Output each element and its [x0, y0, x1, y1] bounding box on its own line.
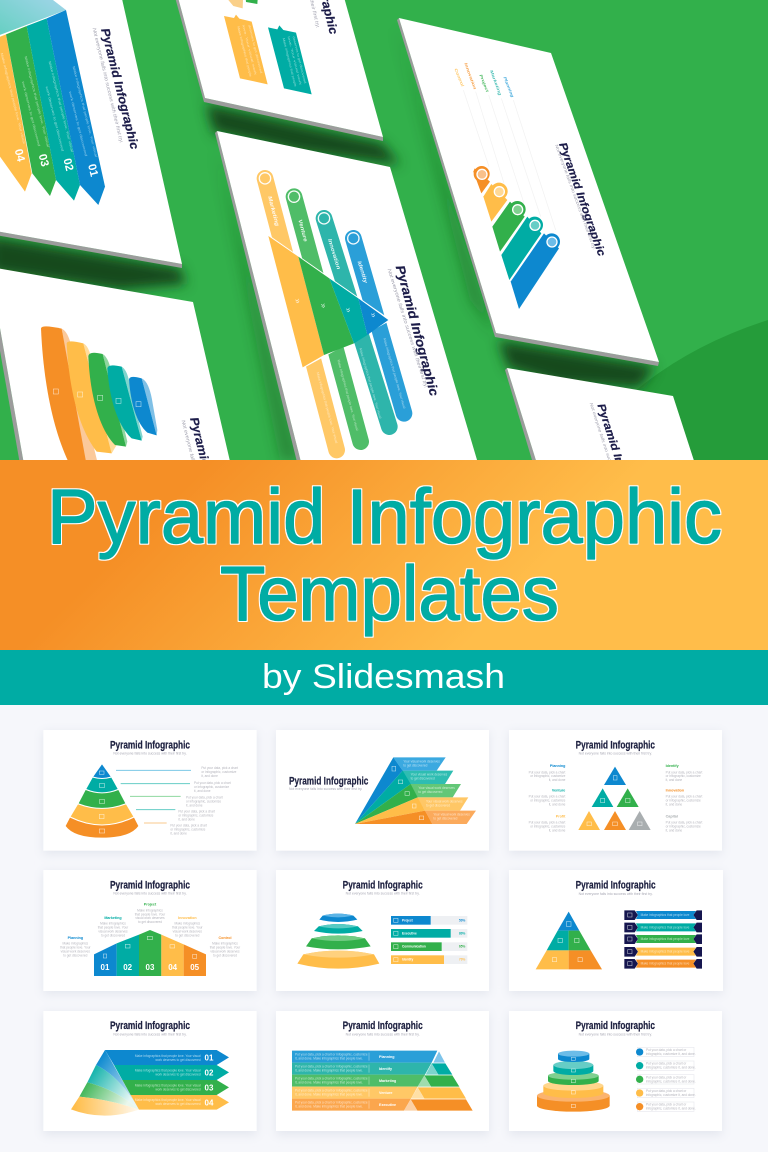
legend: infographic, customize it, and done. [646, 1079, 696, 1083]
legend: Put your data, pick a chart or [646, 1089, 686, 1093]
slide: centre arrow pyramid [215, 131, 480, 470]
arrow pyramid graphic: Make infographics that people love. Your visual [382, 338, 406, 409]
legend: Put your data, pick a chart or [646, 1062, 686, 1066]
descriptions: or infographic, customize [194, 785, 229, 789]
orange title banner [0, 460, 768, 650]
left labels: it, and done [549, 828, 566, 832]
house chart: 03 [146, 963, 155, 972]
heading: Pyramid Infographic [343, 880, 423, 892]
descriptions: it, and done [201, 774, 218, 778]
step labels: visual work deserves [135, 916, 165, 920]
arrow bands: Make infographics that people love. Your visual [135, 1069, 201, 1073]
progress bars: 70% [459, 958, 466, 962]
step labels: visual work deserves [173, 929, 202, 933]
left labels: Put your data, pick a chart [529, 770, 565, 774]
ribbons: Make infographics that people love [641, 937, 690, 941]
arrow pyramid graphic: Innovation [326, 238, 341, 271]
left labels: it, and done [549, 802, 566, 806]
step labels: Innovation [178, 916, 197, 920]
callout boxes: love. Your visual work [287, 36, 303, 86]
table rows: Venture [379, 1091, 392, 1095]
table rows: it, and done. Make infographics that people love. [295, 1105, 363, 1109]
table rows: Planning [379, 1055, 394, 1059]
gallery background [0, 705, 768, 1152]
left labels: or infographic, customize [530, 774, 566, 778]
progress bars: Executive [402, 931, 417, 935]
progress bars: Project [402, 918, 414, 922]
step labels: Project [144, 903, 157, 907]
layers: Your visual work deserves [411, 773, 448, 777]
tiers [537, 1051, 610, 1112]
subheading: Not everyone falls into success with their first try. [113, 752, 187, 756]
left labels: it, and done [549, 778, 566, 782]
progress bars: 80% [459, 931, 466, 935]
layers: to get discovered [418, 790, 443, 794]
step labels: Make infographics [175, 922, 201, 926]
stepped pyramid graphic [453, 62, 607, 309]
descriptions: it, and done [194, 789, 211, 793]
ribbon graphic: 03 [36, 153, 50, 168]
legend: infographic, customize it, and done. [646, 1066, 696, 1070]
layers: to get discovered [433, 817, 458, 821]
table rows: it, and done. Make infographics that people love. [295, 1069, 363, 1073]
legend: infographic, customize it, and done. [646, 1093, 696, 1097]
step labels: to get discovered [175, 933, 200, 937]
callout boxes: Make infographics that people [236, 26, 253, 77]
step labels: visual work deserves [61, 949, 90, 953]
callout boxes: deserves to get discovered [292, 36, 307, 84]
ribbons: Make infographics that people love [641, 962, 690, 966]
arrow pyramid graphic: Make infographics that people love. Your visual [316, 372, 339, 444]
progress bars: 65% [459, 945, 466, 949]
layers: Your visual work deserves [403, 759, 440, 763]
right labels: Identify [666, 764, 680, 768]
heading: Pyramid Infographic [343, 1020, 423, 1032]
subheading: Not everyone falls into success with their first try. [113, 892, 187, 896]
legend: Put your data, pick a chart or [646, 1103, 686, 1107]
stepped pyramid graphic: Not everyone falls into success with their first try. [554, 144, 597, 250]
panel: cone pyramid [43, 730, 257, 851]
right pyramid [404, 1051, 473, 1111]
heading: Pyramid Infographic [110, 739, 190, 751]
descriptions [170, 766, 238, 836]
step labels: that people love. Your [135, 912, 165, 916]
step labels: that people love. Your [210, 946, 240, 950]
panel: table pyramid [276, 1011, 489, 1131]
ribbons: Make infographics that people love [641, 913, 690, 917]
slide: bottom-left stacked discs [0, 267, 232, 540]
arrow bands: work deserves to get discovered [155, 1087, 201, 1091]
callout boxes: deserves to get discovered [247, 24, 263, 74]
panel: triangle grid [509, 730, 722, 851]
panel: layered discs with progress bars [276, 870, 489, 991]
slide: top-right stepped pyramid [397, 18, 659, 366]
arrow pyramid graphic: Pyramid Infographic [393, 264, 441, 398]
ribbon graphic: Not everyone falls into success with their first try. [91, 27, 124, 144]
arrow bands: work deserves to get discovered [155, 1102, 201, 1106]
arrow bands: Make infographics that people love. Your visual [135, 1083, 201, 1087]
triangle [536, 912, 602, 969]
subheading: Not everyone falls into success with their first try. [579, 752, 652, 756]
arrow bands: Make infographics that people love. Your visual [135, 1054, 201, 1058]
step labels: visual work deserves [210, 949, 240, 953]
legend: infographic, customize it, and done. [646, 1052, 696, 1056]
step labels: that people love. Your [60, 946, 91, 950]
left labels: or infographic, customize [530, 824, 566, 828]
byline: by Slidesmash [262, 658, 505, 696]
house chart: 05 [190, 963, 200, 972]
stepped pyramid graphic: Project [478, 74, 490, 94]
layers: Your visual work deserves [418, 786, 455, 790]
left labels [529, 764, 566, 832]
progress bars [391, 916, 467, 964]
descriptions: Put your data, pick a chart [201, 766, 238, 770]
ribbon graphic: Make infographics that people love. Your visual [72, 66, 98, 158]
main title: Templates [220, 551, 559, 637]
right labels: Put your data, pick a chart [666, 821, 702, 825]
subheading: Not everyone falls into success with their first try. [289, 787, 362, 791]
layers [355, 757, 476, 824]
panel: triangle with ribbons [509, 870, 723, 991]
table rows: it, and done. Make infographics that people love. [295, 1057, 363, 1061]
descriptions: Put your data, pick a chart [186, 795, 223, 799]
left labels: or infographic, customize [530, 799, 566, 803]
subheading: Not everyone falls into success with their first try. [346, 1032, 420, 1036]
progress bars: 50% [459, 918, 466, 922]
step labels: visual work deserves [98, 929, 128, 933]
cone [66, 764, 138, 838]
table rows: Identify [379, 1067, 393, 1071]
stacked disc graphic: Not everyone falls into success with their first try. [180, 420, 214, 536]
legend: infographic, customize it, and done. [646, 1107, 696, 1111]
table rows: Put your data, pick a chart or infographic, customize [295, 1089, 368, 1093]
step labels: Planning [68, 936, 83, 940]
descriptions: Put your data, pick a chart [170, 824, 207, 828]
descriptions: Put your data, pick a chart [194, 781, 231, 785]
table rows: Marketing [379, 1079, 396, 1083]
ribbons: Make infographics that people love [641, 925, 690, 929]
panel: round tier stack [509, 1011, 722, 1131]
step labels: Make infographics [137, 908, 163, 912]
right labels: or infographic, customize [666, 799, 701, 803]
panel shadows [43, 732, 723, 1135]
table rows: Put your data, pick a chart or infographic, customize [295, 1077, 368, 1081]
stepped pyramid graphic: Innovation [463, 62, 478, 91]
house chart [94, 930, 206, 976]
step labels: Make infographics [100, 922, 126, 926]
ribbon graphic: work deserves to get discovered [21, 81, 41, 147]
left labels: Planning [550, 764, 565, 768]
slide: top-middle callouts [173, 0, 383, 141]
slide shadows [0, 20, 655, 460]
step labels: Marketing [104, 916, 122, 920]
step labels: Control [218, 936, 231, 940]
panel: slanted layers pyramid [276, 730, 489, 851]
descriptions: or infographic, customize [170, 828, 206, 832]
disc stack [297, 914, 379, 969]
right labels: Capital [666, 814, 678, 818]
table rows [292, 1051, 437, 1111]
left labels: Profit [556, 814, 566, 818]
right labels: it, and done [666, 828, 682, 832]
heading: Pyramid Infographic [110, 1020, 190, 1032]
slide title: Not everyone falls into success with their first try. [589, 402, 628, 510]
left labels: Put your data, pick a chart [529, 821, 565, 825]
arrow bands: 04 [205, 1098, 214, 1107]
legend: Put your data, pick a chart or [646, 1048, 686, 1052]
slide title: Pyramid Infographic [594, 402, 643, 520]
ribbon graphic: 01 [85, 163, 100, 178]
stacked disc graphic [41, 326, 231, 540]
fan cone [71, 1050, 139, 1116]
arrow bands: 01 [205, 1053, 214, 1062]
main title: Pyramid Infographic [47, 474, 722, 560]
green hero background [0, 0, 768, 462]
arrow pyramid graphic: Not everyone falls into success with their first try. [386, 268, 429, 389]
subheading: Not everyone falls into success with their first try. [579, 892, 653, 896]
callout boxes: love. Your visual work [241, 24, 258, 76]
step labels: to get discovered [213, 953, 237, 957]
arrow pyramid graphic: Venture [296, 219, 308, 242]
stepped pyramid graphic: Planning [502, 76, 516, 99]
legend: Put your data, pick a chart or [646, 1075, 686, 1079]
table rows: Put your data, pick a chart or infographic, customize [295, 1065, 368, 1069]
right labels: it, and done [666, 802, 682, 806]
descriptions: Put your data, pick a chart [178, 809, 215, 813]
heading: Pyramid Infographic [110, 879, 190, 891]
subheading: Not everyone falls into success with their first try. [579, 1032, 652, 1036]
panel: house pyramid [43, 870, 257, 991]
house chart: 01 [101, 963, 110, 972]
arrow pyramid graphic: » [343, 306, 354, 314]
main title [47, 474, 722, 637]
slide: bottom-right title only [505, 368, 697, 520]
arrow pyramid graphic: Make infographics that people love. Your visual [358, 348, 382, 419]
ribbon graphic: work deserves to get discovered [68, 91, 88, 157]
arrow bands: 02 [205, 1068, 214, 1077]
right labels: Put your data, pick a chart [666, 795, 702, 799]
table rows: it, and done. Make infographics that people love. [295, 1081, 363, 1085]
ribbons: Make infographics that people love [641, 950, 690, 954]
ribbon graphic: Make infographics that people love. Your visual [0, 53, 26, 144]
ribbon graphic: work deserves to get discovered [45, 86, 65, 152]
step labels: Make infographics [212, 942, 238, 946]
stacked disc graphic: Pyramid Infographic [187, 416, 231, 540]
progress bars: Communication [402, 945, 426, 949]
ribbon graphic: Pyramid Infographic [98, 27, 142, 151]
descriptions: or infographic, customize [178, 813, 214, 817]
layers: to get discovered [403, 763, 428, 767]
arrow bands [105, 1050, 229, 1110]
ribbon graphic: 02 [60, 157, 75, 172]
descriptions: it, and done [186, 803, 203, 807]
layers: Your visual work deserves [426, 799, 463, 803]
table rows: it, and done. Make infographics that people love. [295, 1093, 363, 1097]
step labels: to get discovered [138, 920, 162, 924]
house chart: 02 [123, 963, 133, 972]
right labels: Put your data, pick a chart [666, 770, 702, 774]
arrow pyramid graphic: Marketing [266, 196, 280, 228]
step labels: that people love. Your [98, 926, 128, 930]
right labels [666, 764, 702, 832]
arrow bands: work deserves to get discovered [155, 1073, 201, 1077]
subheading: Not everyone falls into success with their first try. [346, 892, 420, 896]
callout boxes: Make infographics that people [282, 38, 298, 87]
step labels [60, 903, 240, 957]
layers: Your visual work deserves [433, 813, 470, 817]
left labels: Put your data, pick a chart [529, 795, 565, 799]
leader lines [116, 770, 191, 823]
heading: Pyramid Infographic [576, 739, 655, 751]
right labels: it, and done [666, 778, 682, 782]
step labels: to get discovered [63, 953, 88, 957]
step labels: to get discovered [101, 933, 125, 937]
right labels: Innovation [666, 789, 684, 793]
descriptions: or infographic, customize [201, 770, 237, 774]
ribbon graphic: 04 [12, 148, 27, 164]
callout boxes [220, 0, 341, 94]
table rows: Put your data, pick a chart or infographic, customize [295, 1101, 368, 1105]
arrow pyramid graphic: Make infographics that people love. Your visual [336, 359, 359, 431]
heading: Pyramid Infographic [576, 1020, 655, 1032]
ribbon graphic: Make infographics that people love. Your visual [48, 61, 74, 153]
triangles [578, 767, 651, 830]
table rows: Executive [379, 1103, 396, 1107]
arrow bands: work deserves to get discovered [155, 1058, 201, 1062]
left labels: Venture [552, 789, 565, 793]
subheading: Not everyone falls into success with their first try. [113, 1032, 187, 1036]
ribbons [624, 910, 702, 969]
ribbon graphic [0, 0, 142, 205]
step labels: that people love. Your [172, 926, 203, 930]
arrow pyramid graphic: » [368, 311, 379, 319]
arrow pyramid graphic: » [318, 302, 329, 309]
teal byline strip [0, 650, 768, 705]
arrow bands: Make infographics that people love. Your visual [135, 1098, 201, 1102]
arrow bands: 03 [205, 1083, 214, 1092]
panel: fan pyramid with arrows [43, 1011, 257, 1131]
heading: Pyramid Infographic [289, 775, 368, 787]
legend [636, 1047, 696, 1111]
ribbon graphic: Make infographics that people love. Your visual [24, 56, 50, 148]
slide: top-left ribbons [0, 0, 182, 268]
stepped pyramid graphic: Pyramid Infographic [556, 141, 607, 258]
descriptions: or infographic, customize [186, 799, 221, 803]
arrow pyramid graphic: Identity [356, 260, 368, 285]
table rows: Put your data, pick a chart or infographic, customize [295, 1053, 368, 1057]
arrow pyramid graphic: » [293, 297, 304, 305]
layers: to get discovered [411, 777, 435, 781]
right labels: or infographic, customize [666, 824, 701, 828]
descriptions: it, and done [178, 817, 195, 821]
stepped pyramid graphic: Control [453, 68, 466, 88]
arrow pyramid graphic [259, 173, 441, 450]
step labels: Make infographics [63, 942, 89, 946]
heading: Pyramid Infographic [576, 880, 656, 892]
layers: to get discovered [426, 803, 450, 807]
stepped pyramid graphic: Marketing [489, 69, 503, 97]
progress bars: Identity [402, 958, 413, 962]
descriptions: it, and done [170, 832, 187, 836]
right labels: or infographic, customize [666, 774, 701, 778]
house chart: 04 [168, 963, 178, 972]
